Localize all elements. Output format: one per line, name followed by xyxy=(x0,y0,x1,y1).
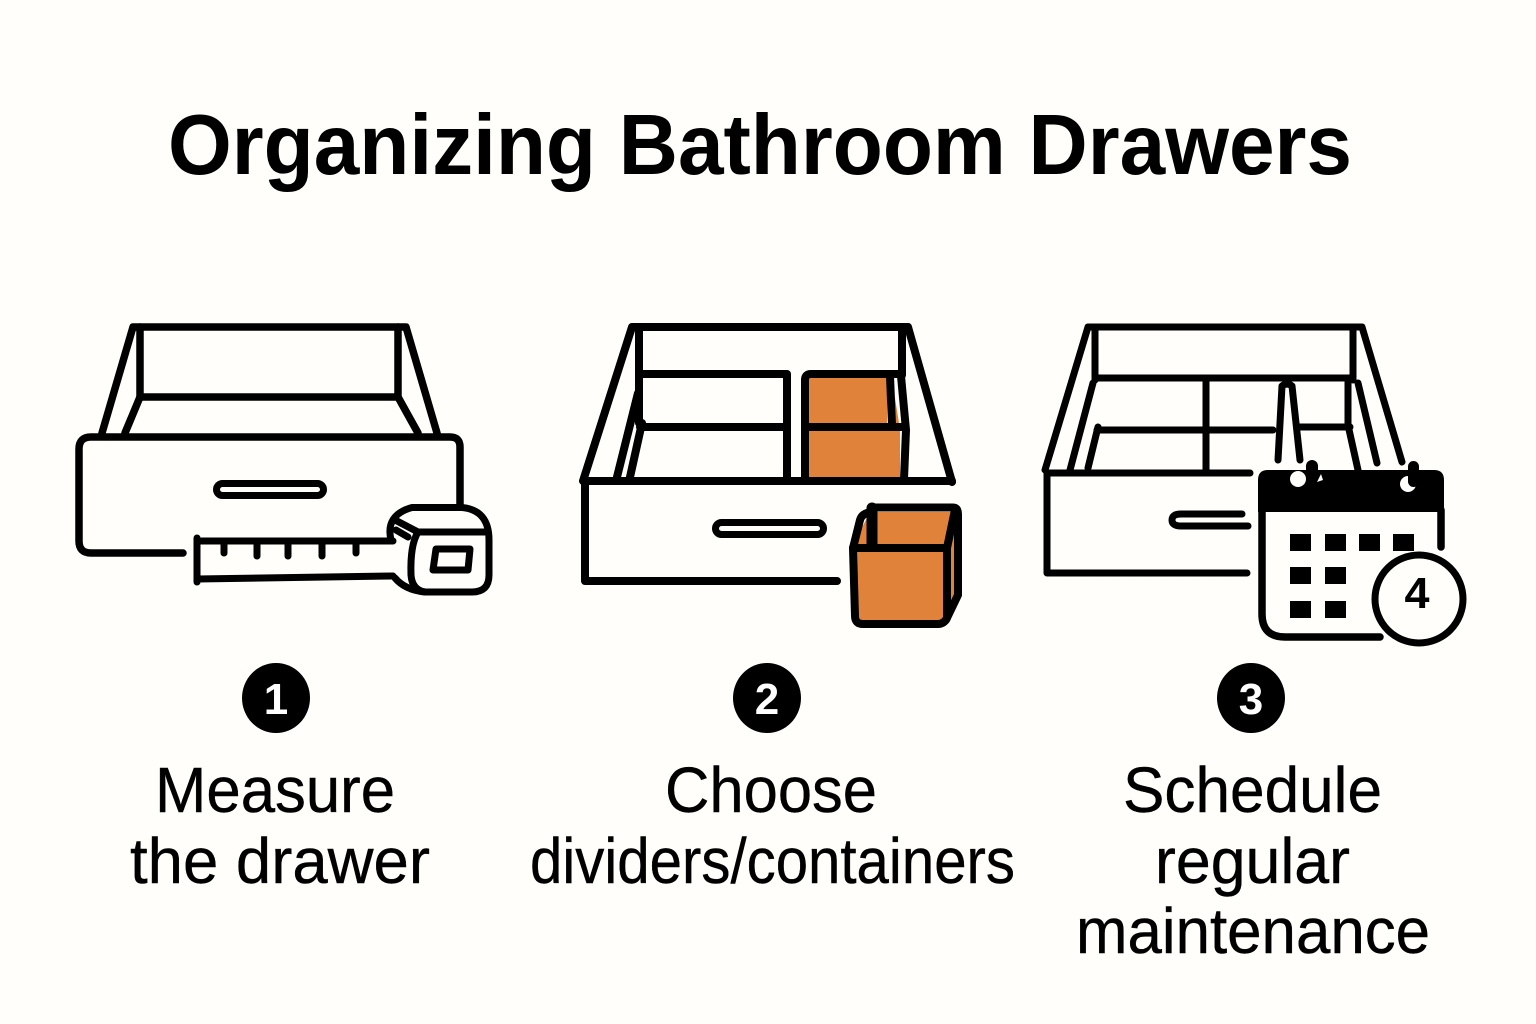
icon: circled number 4: 4 xyxy=(1404,569,1430,618)
badge: number 1: 1 xyxy=(264,675,288,724)
badge: number 2: 2 xyxy=(755,675,779,724)
icon: drawer with compartments xyxy=(1045,327,1402,573)
icon: orange container xyxy=(853,508,958,624)
icon: circled number 4 xyxy=(1375,555,1463,643)
label: choose dividers/containers: dividers/containers xyxy=(530,825,1015,897)
label: schedule regular maintenance: maintenance xyxy=(1076,895,1430,967)
label: measure the drawer xyxy=(130,754,430,897)
label: schedule regular maintenance xyxy=(1076,754,1430,967)
icon: tape measure xyxy=(197,508,489,592)
panel: step 1 measure the drawer xyxy=(79,327,489,897)
icon: calendar xyxy=(1258,460,1463,643)
label: choose dividers/containers xyxy=(530,754,1015,897)
badge: number 3: 3 xyxy=(1239,675,1263,724)
label: schedule regular maintenance: Schedule xyxy=(1123,754,1382,826)
label: measure the drawer: the drawer xyxy=(130,825,430,897)
panel: step 3 schedule maintenance xyxy=(1045,327,1463,967)
badge: number 1 xyxy=(242,663,310,733)
title: Organizing Bathroom Drawers xyxy=(168,98,1352,193)
label: choose dividers/containers: Choose xyxy=(665,754,877,826)
panel: step 2 choose dividers xyxy=(530,327,1015,897)
label: schedule regular maintenance: regular xyxy=(1155,825,1350,897)
icon: drawer with dividers xyxy=(583,327,952,581)
icon: open drawer xyxy=(79,327,460,553)
label: measure the drawer: Measure xyxy=(155,754,395,826)
badge: number 2 xyxy=(733,663,801,733)
badge: number 3 xyxy=(1217,663,1285,733)
